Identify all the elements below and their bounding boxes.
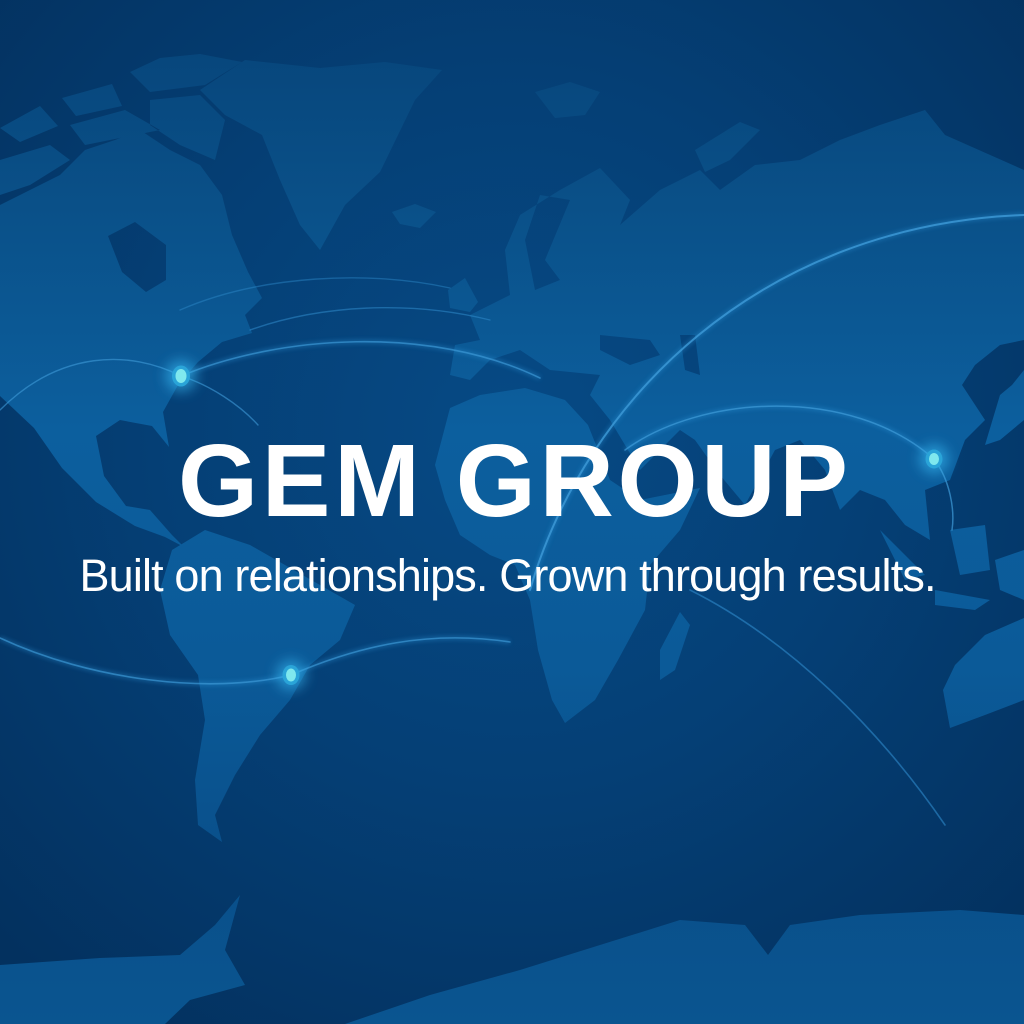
route lines: [0, 215, 1024, 825]
map: North America: [0, 130, 262, 547]
tagline: Built on relationships. Grown through results.: [80, 550, 936, 601]
map: Madagascar: [660, 612, 690, 680]
arc: Africa to Pacific: [690, 590, 945, 825]
map: Eurasia: [450, 110, 1024, 540]
map: Greenland: [200, 60, 442, 250]
map: South America: [160, 530, 355, 842]
arc: Asia hub: [625, 406, 953, 530]
map: Africa: [435, 388, 700, 723]
map: Russian Arctic islands: [695, 122, 760, 172]
node: New York: [165, 360, 197, 392]
map: Southeast Asia islands: [880, 525, 1024, 610]
arc: Americas to Eastern Hemisphere: [530, 215, 1024, 590]
map: Arctic islands: [0, 54, 242, 195]
node: Sao Paulo: [276, 660, 306, 690]
node: East Asia: [919, 444, 949, 474]
arc: North Atlantic middle: [250, 308, 490, 330]
map: Antarctica: [0, 895, 1024, 1024]
arc: New York west: [0, 359, 258, 425]
map: Australia: [943, 618, 1024, 728]
map: Japan: [985, 370, 1024, 445]
map: Iceland: [392, 204, 436, 228]
map: Svalbard: [535, 82, 600, 118]
route line glow: [0, 215, 1024, 684]
arc: North Atlantic upper: [180, 278, 450, 310]
map: British Isles: [448, 278, 478, 312]
arc: New York to Europe lower: [181, 342, 540, 378]
arc: Sao Paulo: [0, 638, 510, 684]
title: GEM GROUP: [178, 423, 848, 538]
